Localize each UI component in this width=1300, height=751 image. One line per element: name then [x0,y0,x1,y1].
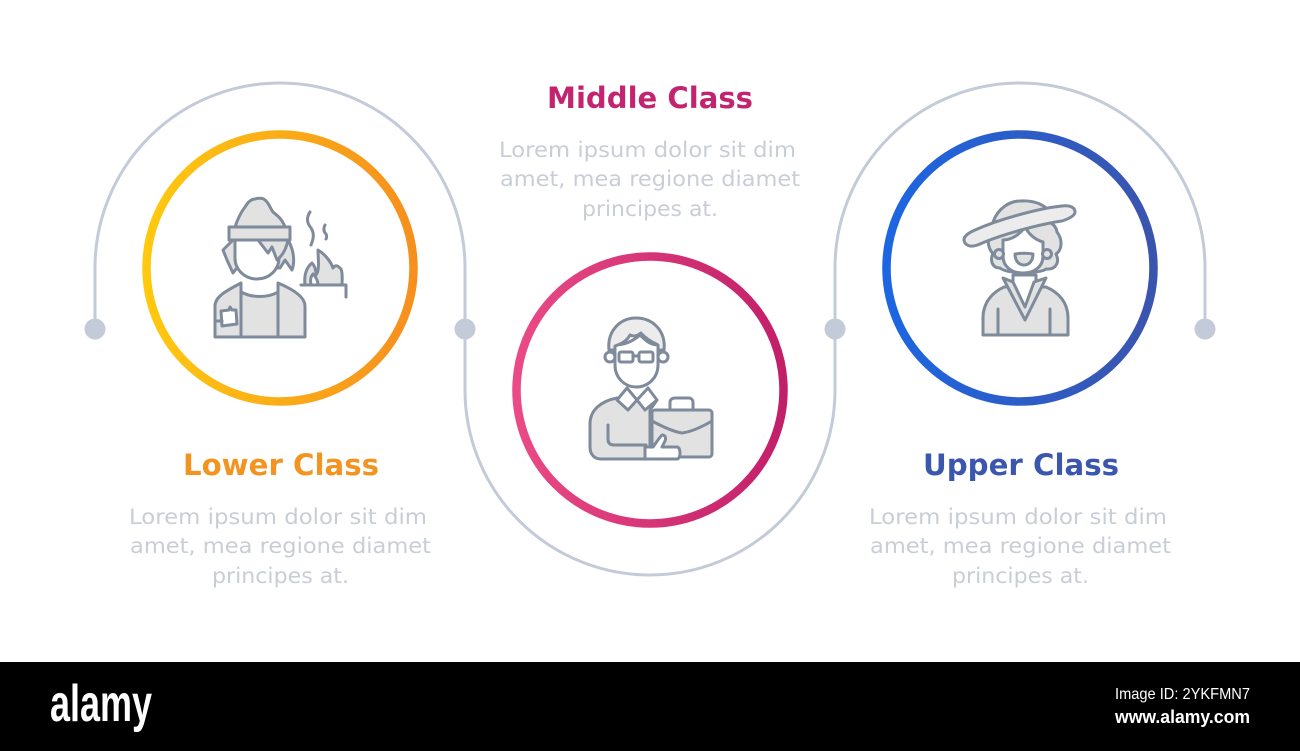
text block: upper class: principes at. [952,564,1089,588]
text block: lower class: principes at. [212,564,349,588]
lower class ring [146,134,414,402]
icon: homeless person with fire [215,198,346,337]
text block: middle class: principes at. [582,197,718,221]
text block: upper class: amet, mea regione diamet [870,534,1171,558]
panel: middle class [499,81,800,524]
image id: Image ID: 2YKFMN7 [1115,686,1250,703]
footer bar with watermark [0,662,1300,751]
connector timeline [84,83,1216,575]
text block: upper class [869,505,1171,588]
text block: lower class: amet, mea regione diamet [130,534,431,558]
icon: office worker with briefcase [590,318,712,459]
text block: middle class: Lorem ipsum dolor sit dim [499,138,796,162]
panel: upper class [869,134,1171,588]
heading: lower class: Lower Class [183,448,379,482]
text block: middle class: amet, mea regione diamet [500,167,800,191]
text block: middle class [499,138,800,221]
heading: middle class: Middle Class [547,81,753,115]
text block: upper class: Lorem ipsum dolor sit dim [869,505,1167,529]
website: www.alamy.com [1114,707,1250,727]
icon: woman with wide hat [964,201,1075,335]
middle class ring [516,256,784,524]
logo: alamy: alamy [50,675,152,733]
text block: lower class [129,505,431,588]
upper class ring [886,134,1154,402]
panel: lower class [129,134,431,588]
text block: lower class: Lorem ipsum dolor sit dim [129,505,427,529]
heading: upper class: Upper Class [923,448,1119,482]
